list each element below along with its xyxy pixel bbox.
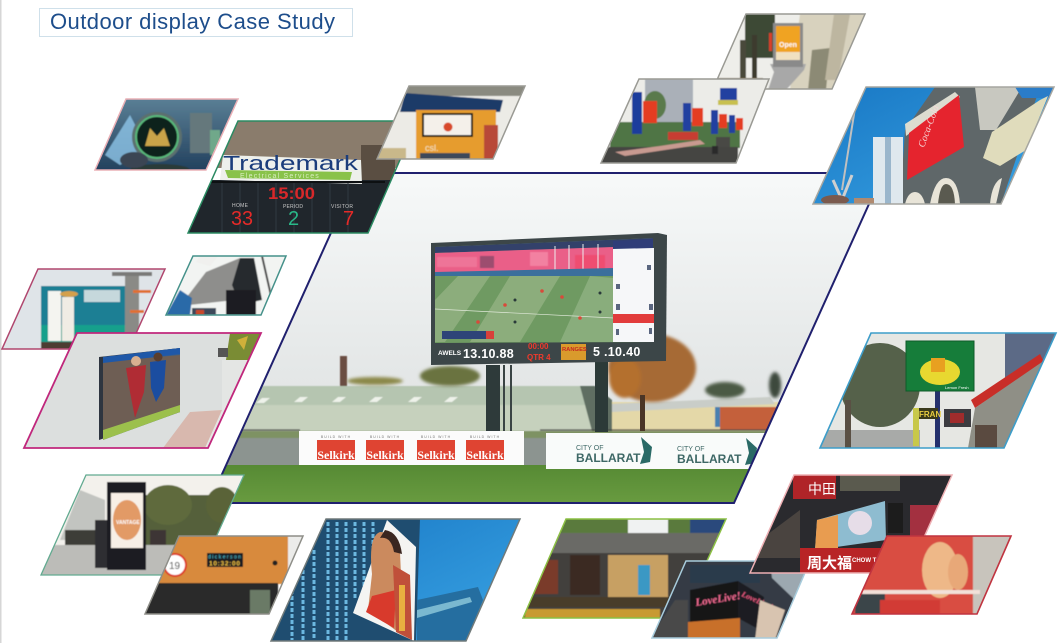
panel: skyscraper display — [268, 517, 523, 643]
ad board: Selkirk: BUILD WITH — [321, 435, 351, 439]
ad board: Selkirk: BUILD WITH — [421, 435, 451, 439]
LED scoreboard: 00:00 — [528, 342, 549, 351]
LED scoreboard: QTR 4 — [527, 353, 551, 362]
panel: Trademark scoreboard: 15:00 — [268, 184, 315, 203]
panel: wall mounted display — [20, 330, 265, 450]
panel: csl indoor display — [375, 84, 530, 162]
panel: Fanta roadside billboard: FRAN — [919, 410, 941, 419]
panel: Trademark scoreboard: 33 — [231, 208, 253, 230]
ad board: Selkirk: Selkirk — [317, 448, 355, 462]
panel: Fanta roadside billboard — [818, 331, 1058, 451]
panel: mall display — [520, 517, 730, 621]
panel: Trademark scoreboard: VISITOR — [331, 204, 353, 210]
panel: city kiosk: VANTAGE — [116, 520, 140, 526]
turf — [223, 465, 748, 502]
panel: couple billboard — [0, 267, 170, 351]
LED scoreboard: 13.10.88 — [463, 347, 514, 361]
panel: Chow Tai Fook display — [745, 473, 955, 575]
panel: Chow Tai Fook display: 周大福 — [807, 552, 852, 573]
panel: orange wall display — [143, 534, 308, 616]
ad board: City of Ballarat: CITY OF — [576, 445, 603, 452]
ad board: Selkirk: Selkirk — [417, 448, 455, 462]
title: Outdoor display Case Study — [50, 9, 335, 34]
LED panel — [99, 348, 180, 440]
ad board: Selkirk: Selkirk — [466, 448, 504, 462]
ad board: City of Ballarat: BALLARAT — [576, 451, 641, 465]
panel: transparent red display — [850, 534, 1015, 618]
panel: Chow Tai Fook display: CHOW TAI — [852, 558, 882, 564]
panel: LoveLive corner display: LoveLive! — [739, 589, 774, 611]
score strip: AWELS — [438, 350, 462, 357]
panel: Coca-Cola building display — [810, 85, 1058, 207]
panel: LoveLive corner display: LoveLive! — [694, 590, 742, 609]
ad board: Selkirk — [299, 431, 524, 465]
side stats panel — [613, 248, 654, 342]
panel: city kiosk — [38, 472, 248, 578]
LED scoreboard: RANGES — [562, 347, 587, 353]
LED scoreboard — [431, 233, 667, 365]
panel: Fanta roadside billboard: Lemon Fresh — [945, 385, 969, 390]
panel: csl indoor display: csl. — [425, 143, 438, 153]
LED scoreboard: 5 .10.40 — [593, 345, 641, 359]
panel: orange wall display: 19 — [169, 561, 181, 572]
panel: pink fantasy display — [94, 98, 239, 171]
panel: panel installation — [164, 254, 289, 318]
panel: Trademark scoreboard: Electrical Services — [240, 173, 320, 180]
ad board: City of Ballarat — [546, 433, 776, 469]
panel: main stadium photo — [200, 170, 890, 510]
ad board: Selkirk: Selkirk — [366, 448, 404, 462]
panel: roadside banners — [598, 77, 773, 167]
scoreboard posts — [486, 365, 500, 432]
panel: Trademark scoreboard: PERIOD — [283, 204, 303, 210]
ad board: Selkirk: BUILD WITH — [470, 435, 500, 439]
ad board: City of Ballarat: BALLARAT — [677, 452, 742, 466]
panel: street pylon sign — [710, 12, 868, 92]
panel: Trademark scoreboard: HOME — [232, 203, 249, 209]
panel: Trademark scoreboard — [186, 120, 401, 234]
panel: Trademark scoreboard: 2 — [288, 208, 299, 230]
ad board: City of Ballarat: CITY OF — [677, 446, 704, 453]
panel: Coca-Cola building display: Coca-Cola — [916, 104, 942, 149]
background buildings — [210, 356, 780, 468]
panel: Chow Tai Fook display: 中田 — [808, 479, 836, 499]
panel: LoveLive corner display — [650, 559, 813, 641]
panel: Trademark scoreboard: 7 — [343, 208, 354, 230]
trees — [347, 334, 781, 402]
panel: street pylon sign: Open — [779, 42, 797, 49]
ad board: Selkirk: BUILD WITH — [370, 435, 400, 439]
panel: orange wall display: dickerson — [208, 554, 241, 560]
panel: orange wall display: 10:32:00 — [209, 560, 240, 568]
panel: Trademark scoreboard: Trademark — [223, 153, 359, 175]
